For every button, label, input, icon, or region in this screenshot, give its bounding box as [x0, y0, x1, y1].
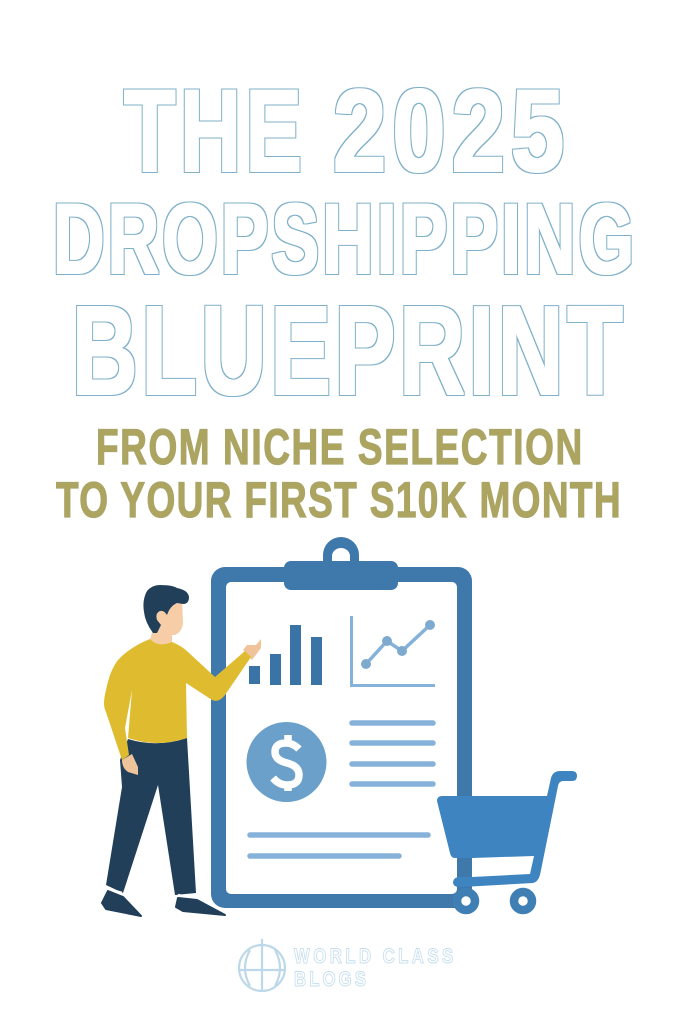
person: hair: [143, 585, 189, 633]
text lines: [250, 723, 433, 856]
title: THE: [124, 65, 302, 196]
bar chart: [249, 625, 322, 685]
subtitle: FROM NICHE SELECTION: [96, 420, 582, 475]
person: hands: [122, 639, 261, 775]
logo wordmark: [294, 945, 453, 992]
person: [102, 585, 261, 916]
logo icon: [239, 939, 285, 991]
title: [53, 65, 634, 422]
line chart: [352, 616, 435, 686]
shopping cart: [437, 771, 577, 910]
clipboard: [211, 537, 472, 908]
subtitle: TO YOUR FIRST S10K MONTH: [56, 473, 621, 528]
person: trousers: [106, 738, 196, 895]
person: sweater: [104, 639, 251, 760]
title: 2025: [333, 65, 564, 196]
subtitle: [56, 420, 621, 528]
title: DROPSHIPPING: [53, 185, 634, 295]
cart wheels: [457, 892, 532, 910]
logo: [239, 939, 453, 992]
title: BLUEPRINT: [72, 282, 623, 422]
icon: dollar coin: [246, 722, 326, 802]
logo wordmark: WORLD CLASS: [294, 945, 453, 969]
person: head and neck: [150, 600, 183, 650]
person: shoes: [102, 891, 225, 916]
logo wordmark: BLOGS: [294, 968, 366, 992]
person: socks: [108, 889, 190, 898]
